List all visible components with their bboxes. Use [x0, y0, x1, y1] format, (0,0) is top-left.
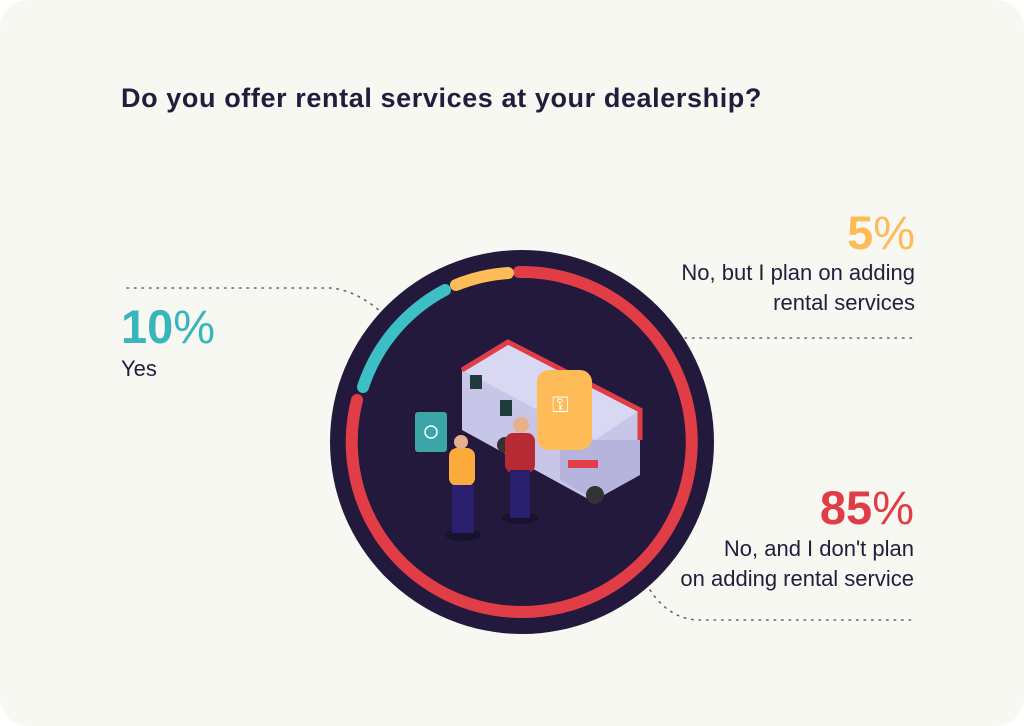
- stat: 5% plan: rental services: [773, 290, 915, 315]
- stat: 85% no: on adding rental service: [680, 566, 914, 591]
- stat: 5% plan: 5%: [847, 206, 915, 259]
- stat: 10% yes: Yes: [121, 356, 157, 381]
- stat: 10% yes: [121, 300, 215, 381]
- icon: orange key bubble: [537, 370, 592, 450]
- stat: 85% no: 85%: [820, 481, 914, 534]
- title: Do you offer rental services at your dealership?: [121, 83, 762, 113]
- illustration: RV: [462, 342, 640, 504]
- people: [445, 417, 538, 541]
- stat: 85% no: [680, 481, 914, 591]
- donut circle: [330, 250, 714, 634]
- stat: 5% plan: [681, 206, 915, 315]
- icon: orange key bubble: ⚿: [552, 392, 569, 417]
- stat: 10% yes: 10%: [121, 300, 215, 353]
- icon: chat bubble: [415, 412, 447, 452]
- leader lines: [127, 288, 915, 620]
- stat: 5% plan: No, but I plan on adding: [681, 260, 915, 285]
- stat: 85% no: No, and I don't plan: [724, 536, 914, 561]
- arcs: [352, 272, 692, 612]
